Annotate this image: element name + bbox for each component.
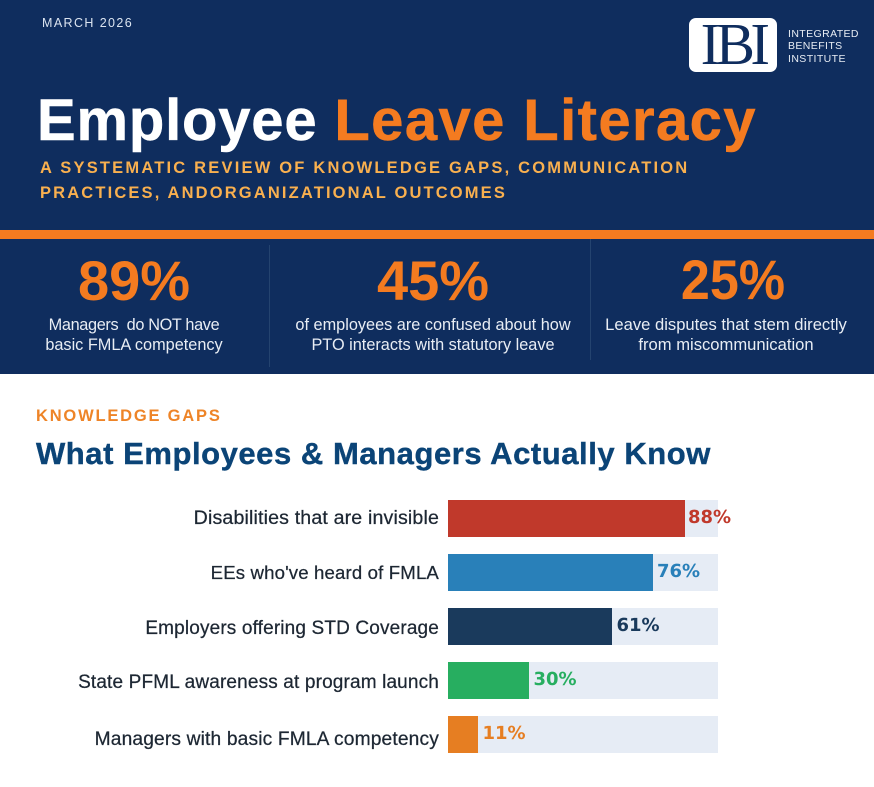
row label: Disabilities that are invisible (194, 507, 439, 529)
section eyebrow: KNOWLEDGE GAPS (36, 407, 222, 425)
bar 30% (448, 662, 718, 699)
orange divider (0, 230, 874, 239)
row label: Employers offering STD Coverage (145, 618, 439, 639)
stat description: Managers do NOT have (49, 316, 219, 334)
row: manager competency (95, 716, 718, 753)
stat number: 45% (377, 249, 489, 312)
logo box (689, 18, 777, 72)
stat: 89% (45, 249, 223, 354)
row: PFML awareness (78, 662, 718, 699)
stat number: 89% (78, 249, 190, 312)
stat description: from miscommunication (638, 335, 814, 354)
bar 30%: 30% (534, 669, 577, 690)
logo letters: IBI (701, 11, 765, 77)
stat description (45, 316, 223, 354)
bar 76%: 76% (657, 561, 700, 582)
date: MARCH 2026 (42, 16, 133, 30)
subtitle (40, 159, 689, 202)
bar 88%: 88% (688, 507, 731, 528)
title: Employee Leave Literacy (37, 88, 757, 153)
stat description (605, 315, 847, 354)
stat description (295, 316, 571, 354)
bar 76% (448, 554, 718, 591)
row: invisible disabilities (194, 500, 731, 537)
bar chart (78, 500, 731, 753)
stat description: PTO interacts with statutory leave (311, 336, 555, 354)
stat description: basic FMLA competency (45, 336, 223, 354)
row label: State PFML awareness at program launch (78, 672, 439, 693)
subtitle: PRACTICES, ANDORGANIZATIONAL OUTCOMES (40, 184, 507, 202)
bar 61%: 61% (616, 615, 660, 636)
header banner (0, 0, 874, 374)
logo name: INTEGRATED (788, 28, 859, 40)
bar 11%: 11% (482, 723, 526, 744)
stat: 25% (605, 248, 847, 354)
stat description: Leave disputes that stem directly (605, 315, 847, 334)
stat: 45% (295, 249, 571, 354)
row: heard of FMLA (211, 554, 718, 591)
row label: Managers with basic FMLA competency (95, 729, 439, 750)
bar 88% (448, 500, 718, 537)
stat description: of employees are confused about how (295, 316, 571, 334)
logo name (788, 28, 859, 65)
stat number: 25% (681, 248, 785, 311)
section heading: What Employees & Managers Actually Know (36, 436, 711, 471)
bar 61% (448, 608, 718, 645)
subtitle: A SYSTEMATIC REVIEW OF KNOWLEDGE GAPS, COMMUNICATION (40, 159, 689, 177)
logo name: BENEFITS (788, 40, 843, 52)
row: STD coverage (145, 608, 718, 645)
logo name: INSTITUTE (788, 53, 846, 65)
bar 11% (448, 716, 718, 753)
row label: EEs who've heard of FMLA (211, 562, 439, 583)
